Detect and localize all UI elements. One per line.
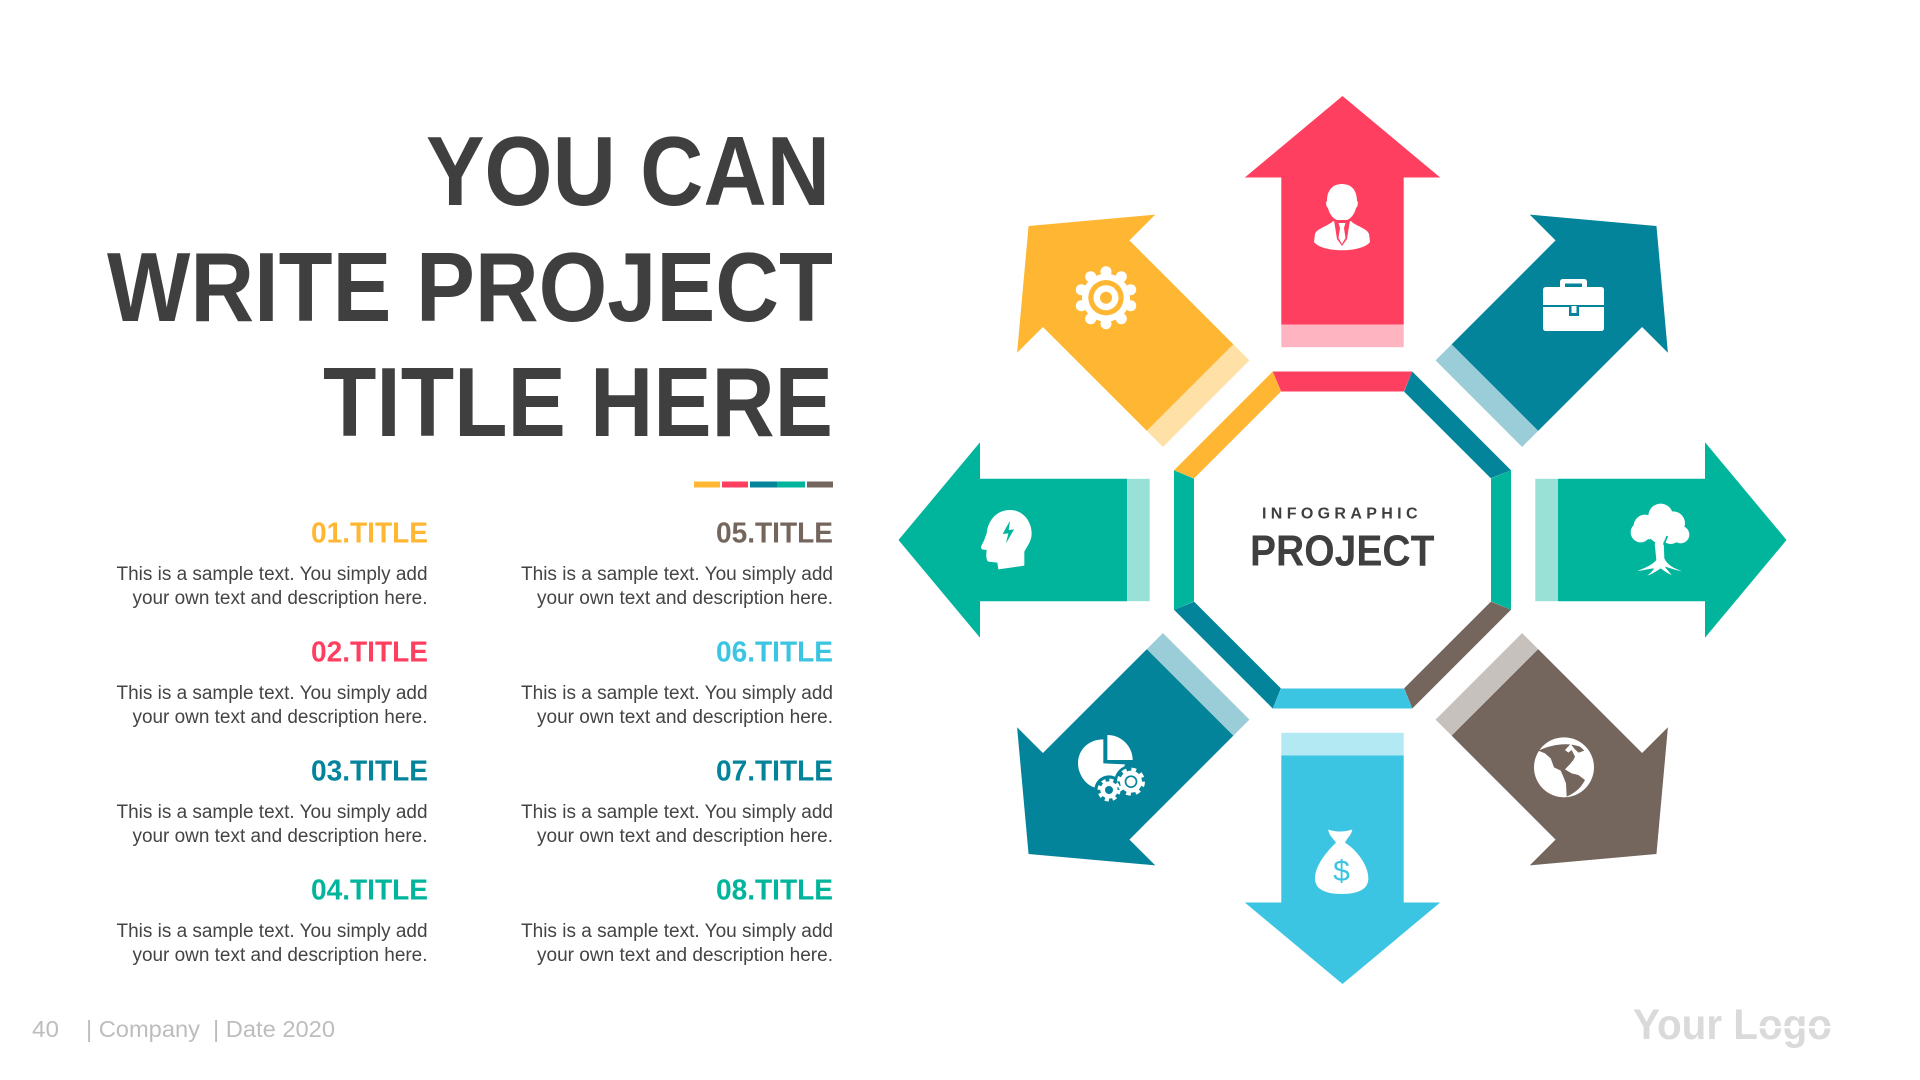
text block: 02: 02.TITLE xyxy=(311,636,428,668)
text block: 07 xyxy=(521,756,833,847)
arrow: lower left teal xyxy=(959,623,1259,923)
icon: money bag xyxy=(1315,829,1368,894)
footer: | Company xyxy=(86,1016,200,1042)
text block: 04: 04.TITLE xyxy=(311,874,428,906)
text block: 06 xyxy=(521,636,833,728)
text block: 01 xyxy=(116,518,428,609)
title: TITLE HERE xyxy=(323,347,833,457)
footer xyxy=(32,1016,335,1042)
text block: 08: your own text and description here. xyxy=(537,945,833,966)
icon: briefcase xyxy=(1543,279,1604,331)
arrow: lower right brown xyxy=(1426,623,1726,923)
icon: money bag: $ xyxy=(1333,855,1350,888)
text block: 01: 01.TITLE xyxy=(311,518,428,550)
text block: 05: This is a sample text. You simply add xyxy=(521,564,833,585)
colour bar xyxy=(694,482,833,488)
text block: 02 xyxy=(116,636,428,728)
text block: 04: your own text and description here. xyxy=(132,945,428,966)
text block: 08 xyxy=(521,874,833,966)
text block: 01: your own text and description here. xyxy=(132,588,428,609)
text block: 08: 08.TITLE xyxy=(716,874,833,906)
icon: gear xyxy=(1076,266,1136,329)
footer: | Date 2020 xyxy=(213,1016,335,1042)
text block: 03: This is a sample text. You simply add xyxy=(116,802,428,823)
text block: 06: This is a sample text. You simply add xyxy=(521,683,833,704)
center label: PROJECT xyxy=(1250,526,1435,576)
arrow: bottom cyan xyxy=(1245,733,1440,984)
logo: Your Logo xyxy=(1633,1001,1832,1049)
icon: businessman xyxy=(1314,184,1370,250)
text block: 03 xyxy=(116,756,428,847)
icon: globe xyxy=(1534,737,1594,797)
text block: 05: your own text and description here. xyxy=(537,588,833,609)
arrow: right green xyxy=(1535,442,1786,638)
text block: 03: your own text and description here. xyxy=(132,826,428,847)
text block: 06: your own text and description here. xyxy=(537,707,833,728)
text block: 07: This is a sample text. You simply add xyxy=(521,802,833,823)
arrow: upper left yellow xyxy=(959,157,1259,457)
arrow: left green xyxy=(898,442,1150,638)
text block: 02: your own text and description here. xyxy=(132,707,428,728)
center label xyxy=(1250,506,1435,576)
title: WRITE PROJECT xyxy=(107,232,833,342)
octagon ring xyxy=(1174,371,1511,709)
center label: INFOGRAPHIC xyxy=(1262,506,1418,522)
text block: 02: This is a sample text. You simply add xyxy=(116,683,428,704)
icon: head with lightning xyxy=(981,510,1032,569)
text block: 06: 06.TITLE xyxy=(716,636,833,668)
text block: 08: This is a sample text. You simply add xyxy=(521,921,833,942)
footer: 40 xyxy=(32,1016,59,1042)
text block: 07: your own text and description here. xyxy=(537,826,833,847)
title: YOU CAN xyxy=(426,116,830,226)
text block: 05: 05.TITLE xyxy=(716,518,833,550)
text block: 03: 03.TITLE xyxy=(311,756,428,788)
text block: 04: This is a sample text. You simply add xyxy=(116,921,428,942)
text block: 04 xyxy=(116,874,428,966)
arrow: top red xyxy=(1245,96,1440,347)
text block: 05 xyxy=(521,518,833,609)
arrow: upper right teal xyxy=(1426,157,1726,457)
icon: pie chart and gears xyxy=(1078,735,1148,805)
text block: 07: 07.TITLE xyxy=(716,756,833,788)
text block: 01: This is a sample text. You simply add xyxy=(116,564,428,585)
title xyxy=(107,116,833,457)
icon: tree xyxy=(1631,504,1689,576)
